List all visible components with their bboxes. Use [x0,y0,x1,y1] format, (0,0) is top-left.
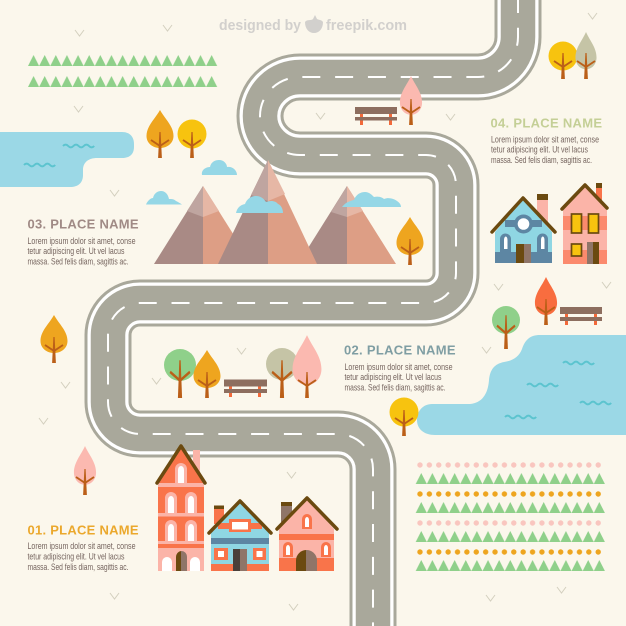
text block 03: tetur adipiscing elit. Ut vel lacus [28,245,125,256]
mountains [154,160,396,264]
text block 01 [28,522,139,572]
tree pink on road [400,76,422,125]
text block 02: tetur adipiscing elit. Ut vel lacus [344,371,442,382]
house blue cottage [492,194,555,263]
text block 01: massa. Sed felis diam, sagittis ac. [28,561,128,572]
text block 01: tetur adipiscing elit. Ut vel lacus [28,550,125,562]
house tall orange [157,446,205,571]
tree yellow top right [548,42,578,79]
text block 04: tetur adipiscing elit. Ut vel lacus [491,144,588,154]
tree pink left [74,446,96,495]
winding road [108,0,518,626]
text block 03: Lorem ipsum dolor sit amet, conse [28,235,136,246]
bench top [355,107,397,125]
text block 03: 03. PLACE NAME [28,216,139,232]
tree red [535,277,557,325]
house pink [277,498,337,571]
text block 01: Lorem ipsum dolor sit amet, conse [28,540,136,551]
house pink salmon [562,183,607,264]
tree green centre [164,349,196,398]
text block 03 [28,216,139,266]
clouds [146,160,401,213]
mountain centre [218,160,317,264]
text block 04: 04. PLACE NAME [490,116,602,130]
text block 02 [344,342,456,392]
tree orange left [40,315,68,363]
text block 01: 01. PLACE NAME [28,522,139,538]
green triangle rows top left [28,55,217,87]
text block 03: massa. Sed felis diam, sagittis ac. [28,256,128,266]
tree orange in mountains [396,217,424,265]
watermark logo [219,15,407,34]
watermark logo: freepik.com [326,18,407,34]
green triangles and dots pattern rows [415,461,605,571]
bench centre [224,380,267,397]
watermark logo: designed by [219,18,302,34]
text block 02: Lorem ipsum dolor sit amet, conse [344,361,452,372]
mountain left [154,186,252,264]
text block 02: massa. Sed felis diam, sagittis ac. [344,382,446,392]
lake right [417,335,626,435]
mountain right [298,186,396,264]
tree orange centre [194,350,220,398]
tree orange [146,110,174,158]
tree tan top right [575,32,597,79]
tree green right [492,306,520,349]
text block 04 [490,116,602,165]
tree tan centre [266,348,298,398]
text block 02: 02. PLACE NAME [344,342,456,358]
tree yellow [178,120,206,158]
tree yellow by lake [390,398,418,436]
bench right [560,307,602,325]
tree pink large [293,335,321,398]
lake left [0,132,134,187]
house blue orange [209,501,271,571]
